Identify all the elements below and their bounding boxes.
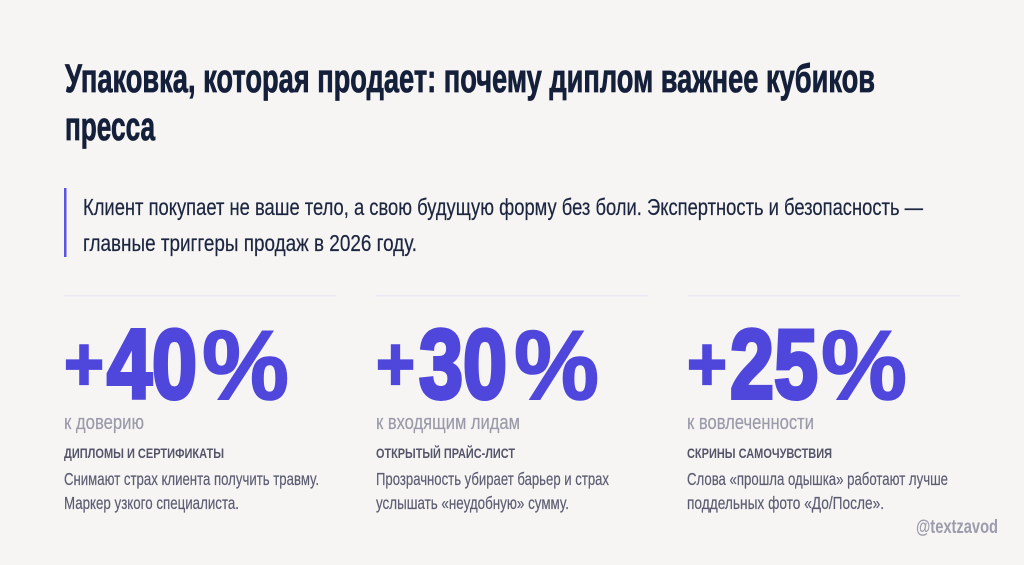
stat: +25%: % — [821, 310, 907, 420]
description: Прозрачность убирает барьер и страх — [376, 469, 609, 489]
category: СКРИНЫ САМОЧУВСТВИЯ — [687, 445, 832, 461]
stat: +40%: 40 — [107, 309, 197, 419]
title: пресса — [65, 105, 155, 149]
description: услышать «неудобную» сумму. — [376, 493, 569, 513]
metric label: к вовлеченности — [687, 412, 814, 434]
metric label: к доверию — [64, 412, 144, 434]
credit: @textzavod — [916, 517, 998, 538]
stat: +25%: + — [687, 322, 727, 407]
description: поддельных фото «До/После». — [687, 493, 884, 513]
lead text: главные триггеры продаж в 2026 году. — [83, 230, 417, 256]
category: ОТКРЫТЫЙ ПРАЙС-ЛИСТ — [376, 444, 515, 461]
stat: +30%: 30 — [419, 309, 507, 419]
lead text — [83, 194, 923, 256]
stat: +25%: 25 — [730, 309, 818, 419]
description: Снимают страх клиента получить травму. — [64, 469, 319, 489]
stat: +40%: + — [64, 322, 104, 407]
description — [376, 469, 609, 513]
description — [687, 469, 948, 513]
description: Слова «прошла одышка» работают лучше — [687, 469, 948, 489]
panel: price list — [376, 295, 648, 513]
description — [64, 469, 319, 513]
panel: diplomas — [64, 295, 336, 513]
category: ДИПЛОМЫ И СЕРТИФИКАТЫ — [64, 445, 224, 461]
title — [65, 57, 875, 149]
stat: +30%: + — [376, 322, 415, 407]
description: Маркер узкого специалиста. — [64, 493, 239, 513]
stat: +30%: % — [514, 310, 599, 420]
stat: +40%: % — [202, 310, 289, 420]
metric label: к входящим лидам — [376, 412, 520, 434]
panel: wellbeing screenshots — [687, 295, 960, 513]
accent bar — [64, 188, 66, 257]
